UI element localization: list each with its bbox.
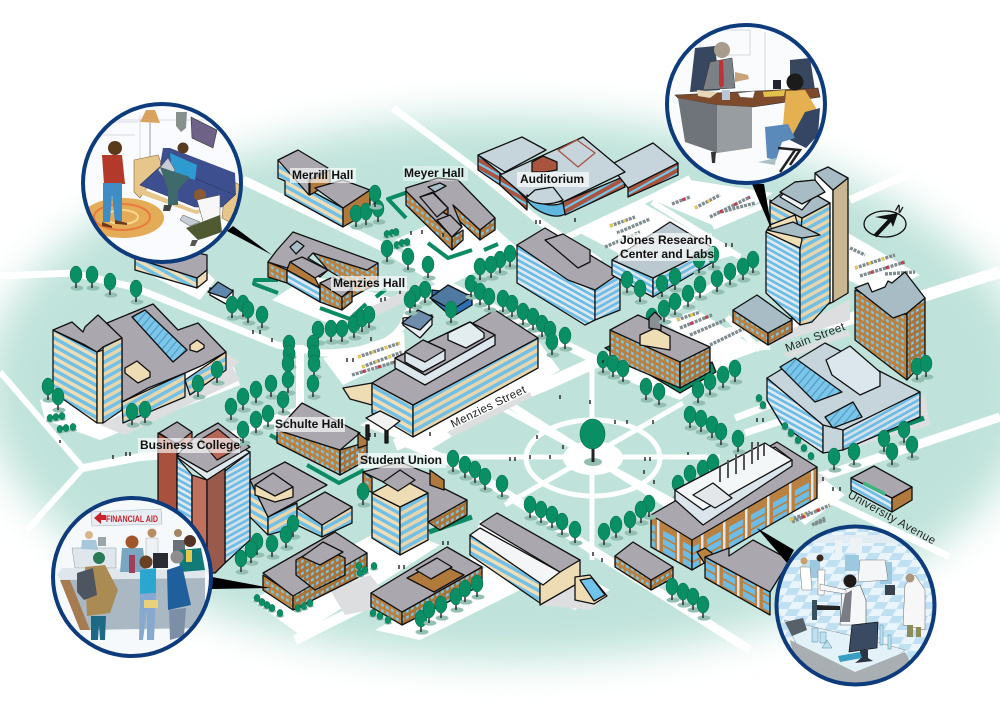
building: Schulte Hall [277, 403, 367, 475]
building: Meyer Hall [406, 178, 495, 250]
building: brown tower east [855, 272, 925, 380]
central plaza tree [580, 419, 605, 466]
street label: Menzies Street: Menzies Street [449, 384, 529, 431]
building: large pale conference center [767, 343, 920, 453]
green campus ground [0, 116, 1000, 660]
circle: laboratory scene [776, 526, 934, 690]
sign: FINANCIAL AID [91, 509, 162, 526]
building: Jones Research Center and Labs [612, 222, 713, 297]
label: Jones Research Center and Labs: Jones Research [620, 233, 712, 247]
pedestrians [60, 218, 840, 569]
compass [864, 203, 906, 237]
building: Menzies Hall [268, 232, 378, 310]
building: Merrill Hall [278, 150, 370, 227]
building: small brown lab annex [615, 542, 673, 590]
label: Meyer Hall: Meyer Hall [404, 166, 464, 180]
label: Menzies Hall: Menzies Hall [333, 276, 405, 290]
building: small brown annex by tower [733, 295, 792, 345]
label: Merrill Hall: Merrill Hall [292, 168, 353, 182]
circle: advising office scene [667, 25, 825, 183]
building: Business College tower [158, 422, 250, 573]
trees behind buildings [494, 245, 720, 500]
building: low cream hall [250, 462, 352, 537]
building: Auditorium [478, 137, 678, 216]
pointer wedges [212, 184, 794, 589]
road network [0, 108, 1000, 650]
compass: N [893, 203, 905, 216]
circle: dorm room scene [82, 104, 241, 262]
blue house [430, 285, 472, 317]
green hedges near Meyer and Menzies [254, 192, 924, 532]
label: Jones Research Center and Labs [618, 233, 714, 261]
building: long hall south [470, 513, 607, 605]
building: tall main tower [766, 167, 848, 325]
trees and shrubs [42, 185, 934, 635]
central plaza ring [526, 420, 660, 496]
circle: financial aid office scene [53, 498, 211, 656]
building: small green-stripe building [851, 466, 912, 512]
small house [208, 282, 233, 304]
building: south brown hall long [371, 547, 482, 625]
street label: Main Street: Main Street [784, 321, 847, 355]
building: blue hall [517, 228, 620, 325]
label: Schulte Hall: Schulte Hall [275, 417, 344, 431]
building: Lab complex [651, 442, 817, 615]
map labels [138, 166, 938, 547]
building: dorm behind circle [135, 240, 207, 288]
label: Jones Research Center and Labs: Center and Labs [620, 247, 714, 261]
building: administration with cupola [605, 312, 716, 393]
gray building shadows [100, 280, 930, 615]
house with gray roof [402, 310, 433, 338]
building: center long hall on Menzies Street [343, 310, 538, 437]
building: south brown hall with tower [263, 532, 367, 610]
paved building pads [40, 205, 730, 640]
sign: FINANCIAL AID: FINANCIAL AID [106, 514, 158, 525]
label: Auditorium: Auditorium [520, 172, 584, 186]
parking lots [323, 180, 920, 525]
street label: University Avenue: University Avenue [846, 489, 938, 547]
entrance canopy [366, 411, 400, 443]
label: Business College: Business College [140, 438, 240, 452]
building: Student Union [363, 462, 467, 555]
label: Student Union: Student Union [360, 453, 442, 467]
building: large cream hall at left [53, 304, 226, 423]
